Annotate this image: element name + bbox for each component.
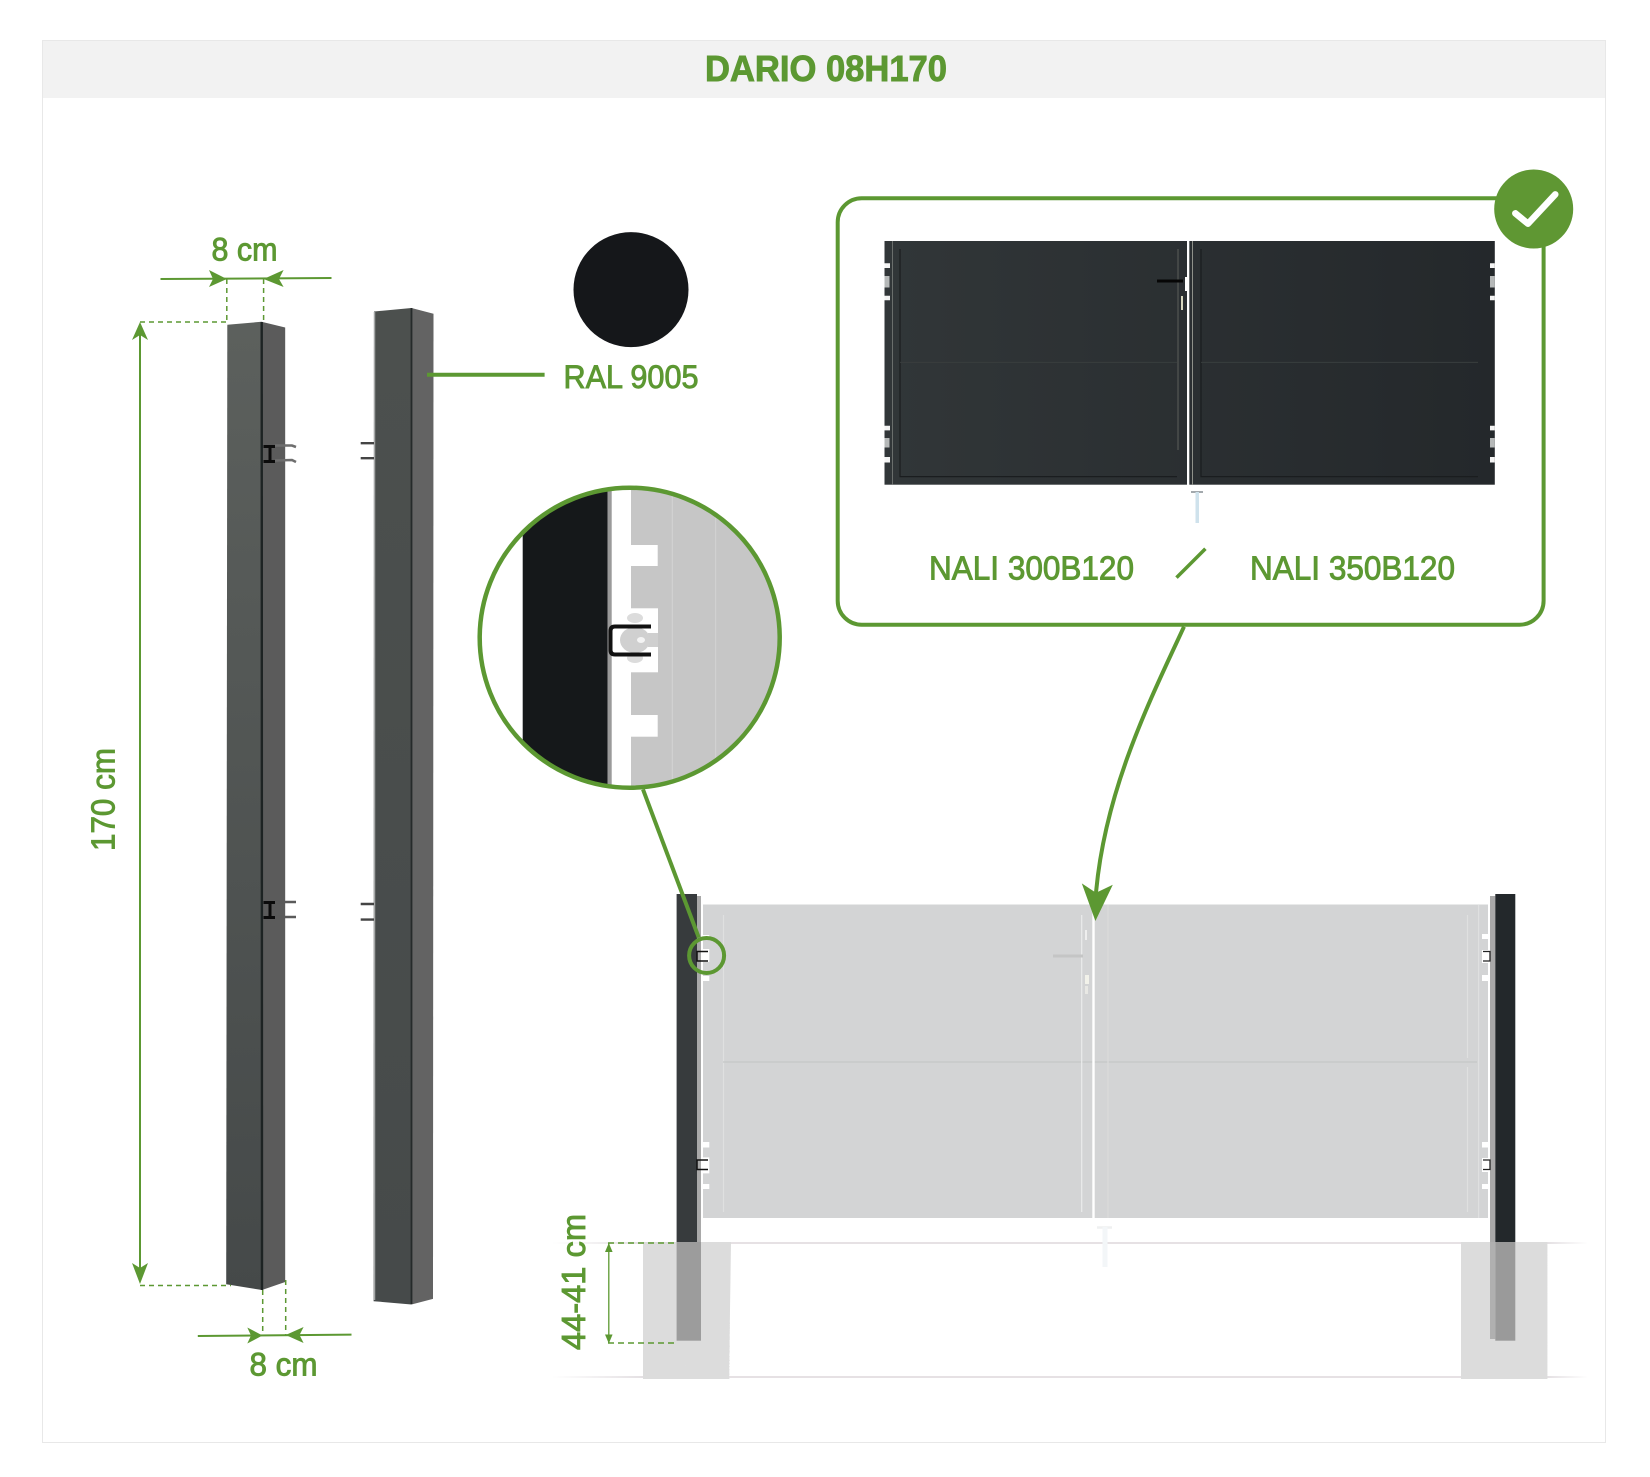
right leaf hinge cut-outs <box>1482 934 1490 1189</box>
colour swatch <box>574 232 688 347</box>
double gate elevation with posts <box>552 894 1588 1379</box>
post without hinges <box>361 308 434 1304</box>
gate leaves ghosted <box>703 904 1488 1267</box>
drop bolt <box>1191 491 1203 493</box>
ground lines <box>552 1242 1588 1378</box>
left post <box>677 894 701 1341</box>
slash separator <box>1176 549 1205 578</box>
title: DARIO 08H170 <box>705 48 947 89</box>
check badge <box>1494 170 1573 248</box>
curved arrow from callout to gate <box>1082 627 1184 921</box>
right concrete footing <box>1461 1242 1547 1379</box>
label: 8 cm: 8 cm <box>212 232 278 268</box>
label: NALI 300B120: NALI 300B120 <box>929 550 1134 586</box>
connector from magnifier to hinge <box>643 789 724 973</box>
drop bolt <box>1097 1226 1112 1229</box>
left leaf hinge cut-outs <box>697 935 709 1189</box>
upper hinge on post <box>264 446 296 462</box>
label: 8 cm: 8 cm <box>250 1346 318 1382</box>
dimension: top width 8 cm <box>160 232 332 322</box>
callout: compatible gates <box>838 198 1544 625</box>
right post <box>1490 894 1515 1341</box>
lower hinge on post <box>264 902 296 918</box>
hinge notches <box>884 263 1495 462</box>
label: NALI 350B120: NALI 350B120 <box>1250 550 1455 586</box>
colour label: RAL 9005 <box>564 359 698 395</box>
left concrete footing <box>643 1242 731 1379</box>
leader line to colour label <box>427 373 545 377</box>
hinge stubs <box>361 443 374 920</box>
dimension: bottom width 8 cm <box>198 1280 352 1382</box>
post with two hinges <box>226 322 296 1290</box>
dimension: foundation depth <box>555 1214 677 1350</box>
gate photo dark <box>884 241 1495 523</box>
magnifier: hinge detail <box>470 480 791 800</box>
dimension: height 170 cm <box>84 322 231 1286</box>
small hinge marker ring <box>689 938 724 973</box>
label: 170 cm: 170 cm <box>84 748 122 851</box>
label: 44-41 cm: 44-41 cm <box>555 1214 592 1350</box>
